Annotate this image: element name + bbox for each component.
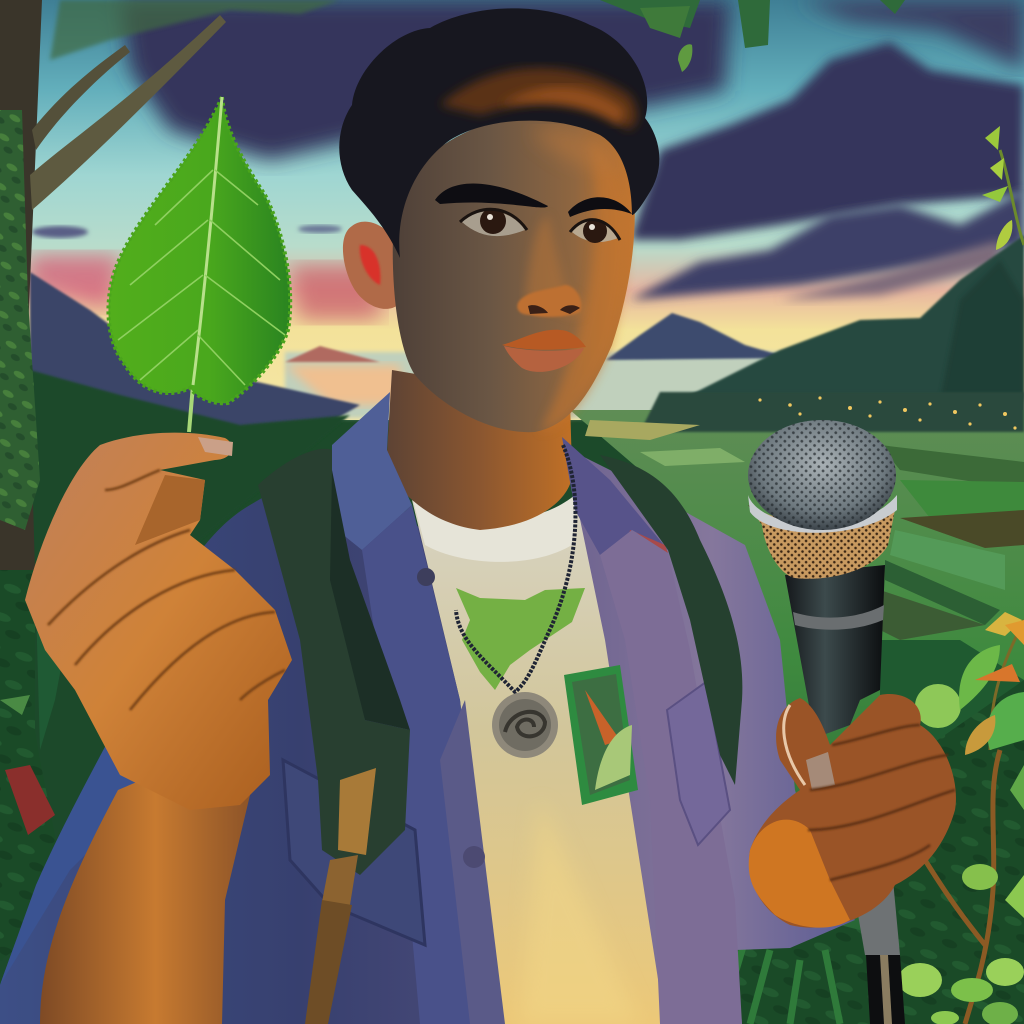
medallion <box>492 692 558 758</box>
leaf <box>108 97 290 403</box>
forearm holding leaf <box>40 770 250 1024</box>
t-shirt square print <box>564 665 638 805</box>
face <box>393 117 635 432</box>
breast pocket <box>283 760 425 945</box>
t-shirt <box>412 495 665 1024</box>
t-shirt map print <box>456 588 585 690</box>
ear <box>343 222 398 309</box>
backpack strap left <box>258 449 410 1024</box>
backpack strap right <box>600 455 742 785</box>
jacket buttons <box>417 568 435 586</box>
microphone <box>748 420 905 1024</box>
hand holding microphone <box>749 694 956 928</box>
left hillside forest <box>0 370 350 960</box>
jacket placket <box>362 505 500 1024</box>
jacket: wearer's right side and sleeve <box>0 450 500 1024</box>
eyebrows <box>435 183 548 208</box>
storm clouds <box>30 0 1024 320</box>
neck <box>386 370 572 530</box>
nose <box>517 285 581 317</box>
upper right branch <box>982 126 1024 250</box>
eyes <box>460 208 620 243</box>
distant sea and mountains <box>30 235 1024 440</box>
hand holding leaf <box>25 433 292 810</box>
left tree with vines <box>0 0 340 960</box>
necklace <box>456 445 575 692</box>
hair <box>339 8 659 258</box>
jacket: wearer's left side and sleeve <box>570 450 855 1024</box>
farmland and village lights <box>570 392 1024 1024</box>
top hanging leaves <box>600 0 905 72</box>
lower right foliage <box>720 612 1024 1024</box>
jacket collar <box>331 392 412 550</box>
mouth <box>502 330 586 350</box>
ground base behind figure <box>0 420 1024 1024</box>
leaf stem <box>189 385 193 432</box>
